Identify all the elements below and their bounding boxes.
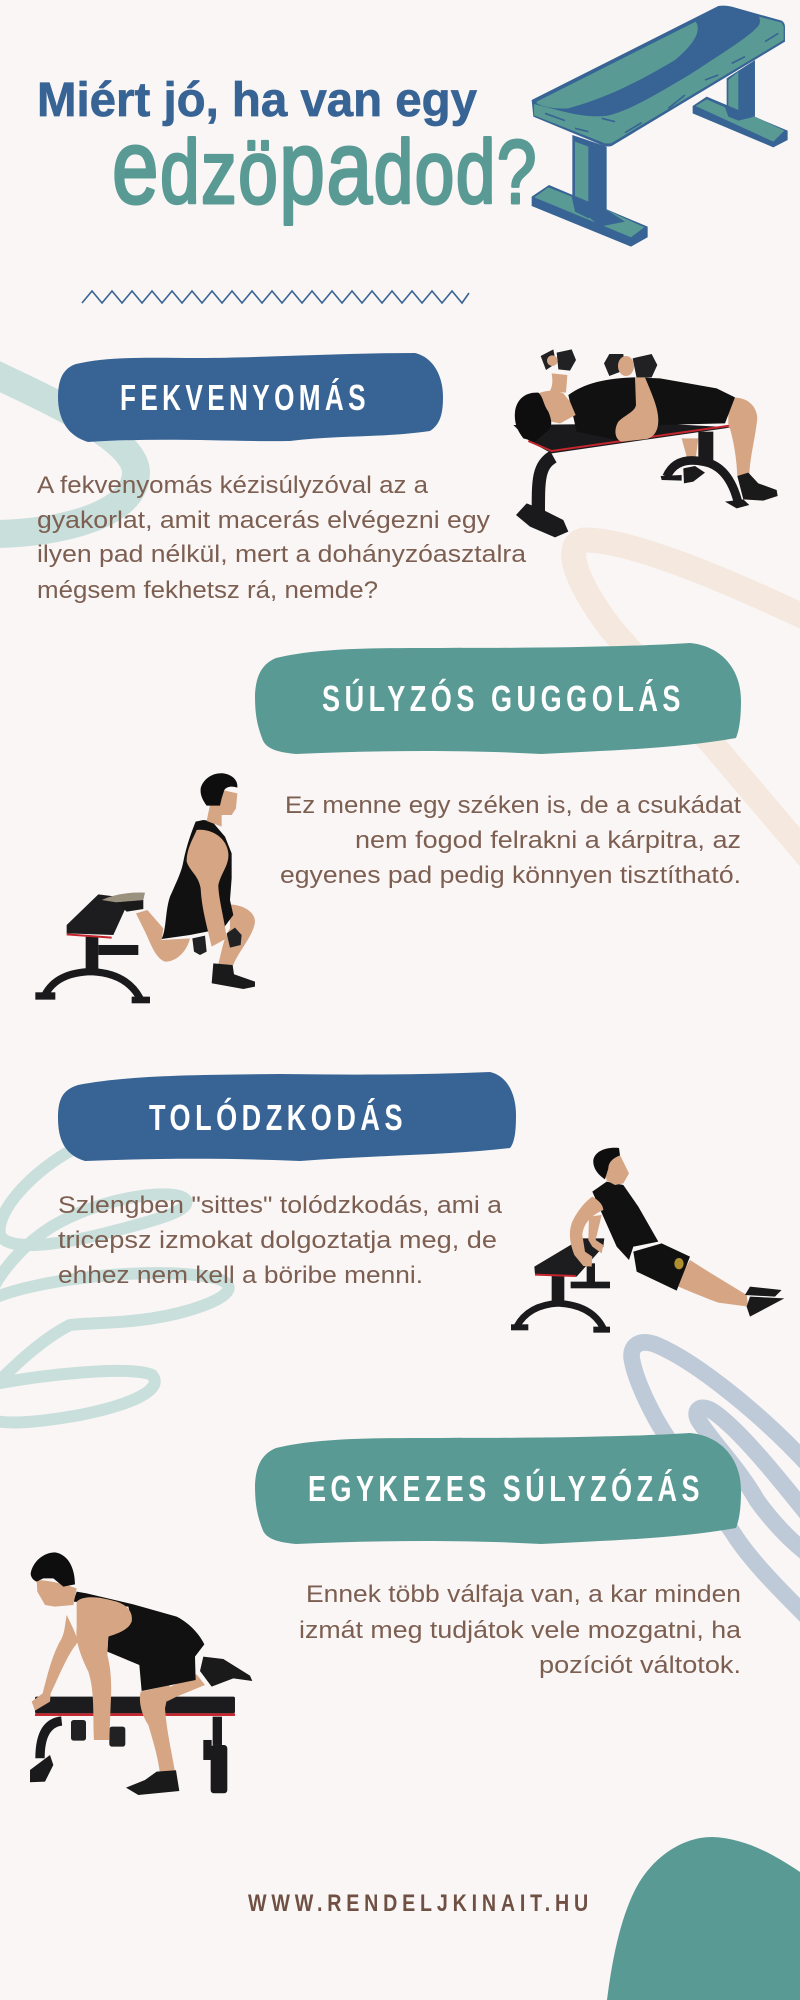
banner label: TOLÓDZKODÁS bbox=[149, 1096, 407, 1138]
body text: egyenes pad pedig könnyen tisztítható. bbox=[280, 862, 741, 889]
body text: Ennek több válfaja van, a kar minden bbox=[306, 1581, 741, 1608]
banner: súlyzós guggolás bbox=[255, 643, 741, 754]
body text: tricepsz izmokat dolgoztatja meg, de bbox=[58, 1227, 497, 1254]
panel: súlyzós guggolás bbox=[35, 643, 741, 1003]
banner: egykezes súlyzózás bbox=[255, 1433, 741, 1544]
body text: ehhez nem kell a böribe menni. bbox=[58, 1262, 423, 1289]
body text bbox=[58, 1192, 502, 1289]
banner: tolódzkodás bbox=[58, 1072, 516, 1161]
body text: Szlengben "sittes" tolódzkodás, ami a bbox=[58, 1192, 502, 1219]
title line 1: Miért jó, ha van egy bbox=[37, 74, 477, 127]
body text: pozíciót váltotok. bbox=[539, 1652, 741, 1679]
photo: man doing weighted split squat bbox=[35, 773, 255, 1003]
body text: Ez menne egy széken is, de a csukádat bbox=[285, 792, 741, 819]
decorative scribble: pale teal loops left bbox=[0, 1150, 229, 1422]
panel: egykezes súlyzózás bbox=[30, 1433, 741, 1795]
footer url: WWW.RENDELJKINAIT.HU bbox=[248, 1890, 593, 1917]
body text: mégsem fekhetsz rá, nemde? bbox=[37, 577, 378, 604]
photo: man bench pressing dumbbells bbox=[513, 349, 778, 537]
photo: man doing one-arm dumbbell row bbox=[30, 1552, 252, 1795]
divider: zigzag line bbox=[82, 291, 469, 303]
body text: ilyen pad nélkül, mert a dohányzóasztalra bbox=[37, 541, 526, 568]
body text: izmát meg tudjátok vele mozgatni, ha bbox=[299, 1617, 741, 1644]
panel: tolódzkodás bbox=[58, 1072, 784, 1333]
body text bbox=[299, 1581, 741, 1679]
body text: nem fogod felrakni a kárpitra, az bbox=[355, 827, 741, 854]
icon: isometric blue-teal bench bbox=[532, 6, 788, 247]
banner: fekvenyomás bbox=[58, 353, 443, 442]
decorative arch: peach loop right bbox=[574, 540, 800, 865]
body text bbox=[280, 792, 741, 889]
title line 2: edzöpadod? bbox=[112, 108, 538, 226]
banner label: FEKVENYOMÁS bbox=[120, 377, 370, 418]
body text: gyakorlat, amit macerás elvégezni egy bbox=[37, 507, 491, 534]
body text: A fekvenyomás kézisúlyzóval az a bbox=[37, 472, 428, 499]
decorative arches: blue-grey loops bottom right bbox=[632, 1342, 800, 1617]
photo: man doing bench dips bbox=[511, 1148, 784, 1333]
banner label: SÚLYZÓS GUGGOLÁS bbox=[322, 677, 685, 719]
decorative swoosh: pale teal curve top left bbox=[0, 372, 136, 534]
decorative blob: teal bottom right bbox=[607, 1837, 800, 2000]
panel: fekvenyomás bbox=[37, 349, 778, 604]
body text bbox=[37, 472, 526, 604]
